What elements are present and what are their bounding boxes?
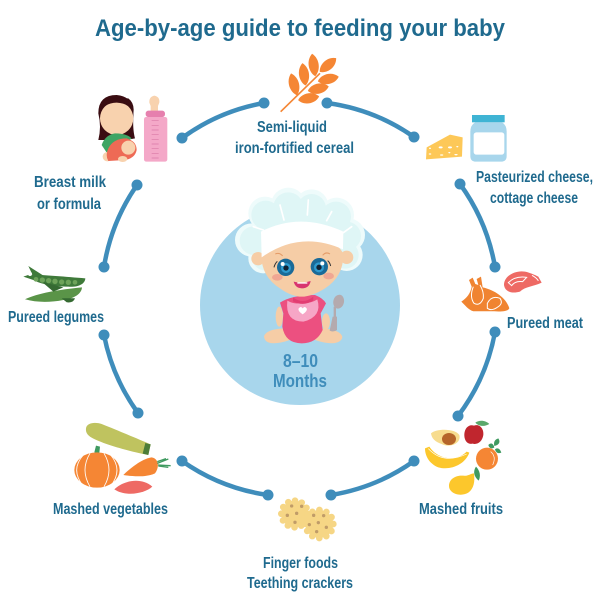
central circle [200, 205, 400, 405]
carrot [123, 457, 158, 476]
spoon [330, 294, 345, 332]
months label: Months [273, 371, 327, 391]
mouth [294, 281, 311, 288]
label: fruits: Mashed fruits [419, 501, 503, 518]
label: finger foods: Teething crackers [247, 575, 353, 592]
icon: mother and baby [98, 95, 137, 162]
chef hat puffs [235, 188, 365, 273]
icon: vegetables [74, 423, 171, 494]
pear [449, 473, 474, 495]
label: cereal: iron-fortified cereal [235, 140, 354, 157]
icon: baby bottle [144, 96, 167, 162]
icon: jar [470, 115, 507, 162]
sweet potato [114, 481, 152, 494]
label: breast milk: or formula [37, 196, 101, 213]
ears [251, 252, 265, 265]
icon: peas [23, 266, 85, 302]
label: breast milk [34, 174, 106, 213]
eyes [274, 253, 331, 276]
apple [464, 425, 483, 444]
icon: steak [504, 271, 542, 293]
banana [425, 447, 469, 468]
label: finger foods: Finger foods [263, 555, 338, 572]
zucchini [86, 423, 151, 455]
icon: cheese [426, 135, 463, 159]
label: breast milk: Breast milk [34, 174, 106, 191]
label: finger foods [247, 555, 353, 592]
label: legumes: Pureed legumes [8, 309, 104, 326]
bib heart [298, 307, 307, 314]
pumpkin [94, 446, 100, 453]
head [261, 237, 343, 297]
avocado [431, 430, 460, 446]
months label [273, 351, 327, 391]
icon: fruits [425, 421, 501, 495]
label: cereal [235, 119, 354, 157]
orange [476, 448, 498, 470]
icon: wheat [281, 53, 340, 112]
months label: 8–10 [283, 351, 318, 371]
cheeks [272, 274, 283, 281]
icon: crackers [281, 501, 333, 538]
icon: chicken [461, 277, 509, 312]
hat band [261, 222, 343, 257]
title: Age-by-age guide to feeding your baby [95, 15, 506, 42]
label: cereal: Semi-liquid [257, 119, 327, 136]
label: vegetables: Mashed vegetables [53, 501, 168, 518]
label: cheese [476, 169, 593, 207]
body with bib [280, 295, 326, 343]
circular timeline arcs [98, 98, 500, 500]
baby legs and arms [264, 307, 342, 343]
baby illustration [235, 188, 365, 343]
